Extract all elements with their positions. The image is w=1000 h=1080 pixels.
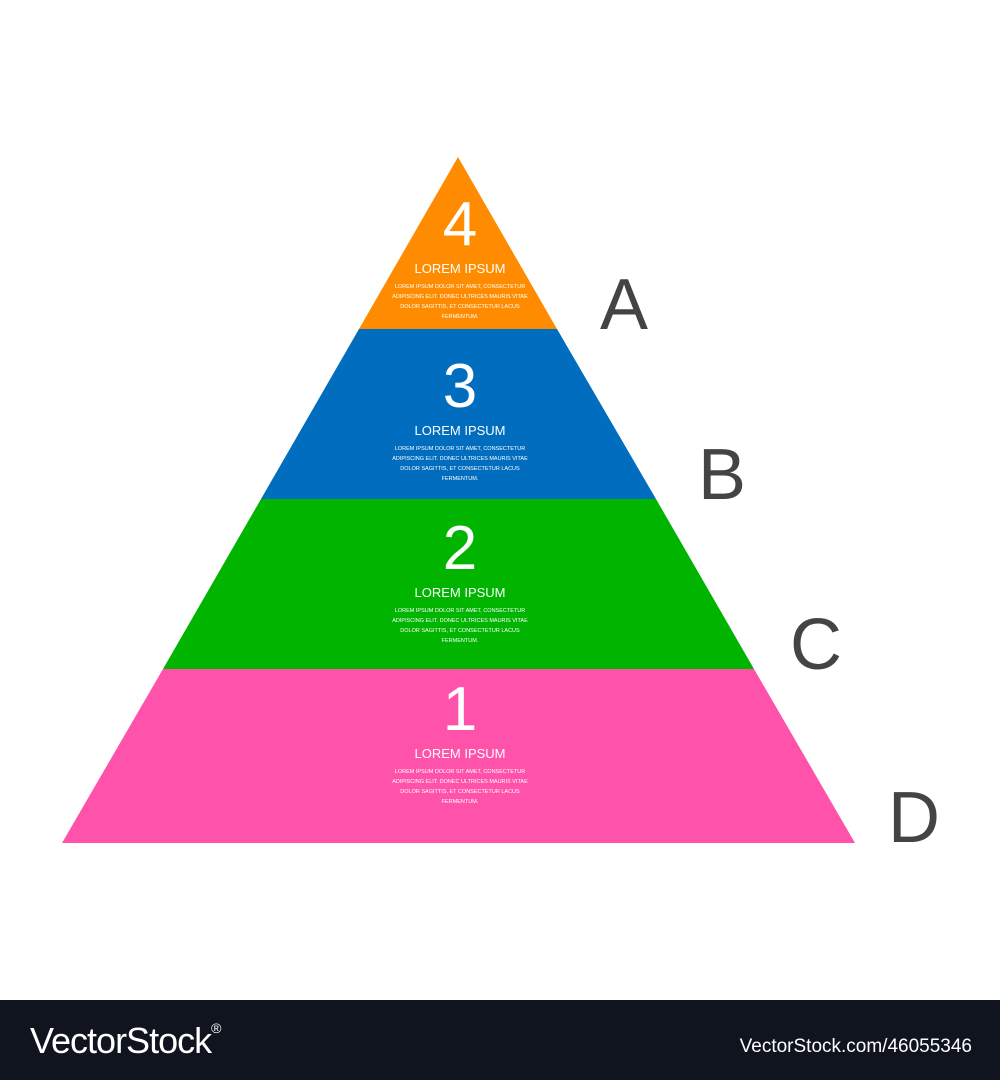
layer 4 orange: DOLOR SAGITTIS, ET CONSECTETUR LACUS: [400, 304, 520, 310]
layer 3 blue: 3: [443, 352, 477, 421]
layer 1 pink: LOREM IPSUM DOLOR SIT AMET, CONSECTETUR: [395, 769, 525, 775]
layer 1 pink: LOREM IPSUM: [414, 746, 506, 761]
side letters: B: [698, 435, 746, 515]
footer logo: VectorStock®: [30, 1020, 220, 1061]
layer 1 pink: FERMENTUM.: [442, 799, 479, 805]
layer 1 pink: ADIPISCING ELIT. DONEC ULTRICES MAURIS VITAE: [392, 779, 528, 785]
layer 1 pink: [62, 669, 855, 843]
layer 3 blue: LOREM IPSUM: [414, 423, 506, 438]
layer 4 orange: 4: [443, 190, 477, 259]
layer 1 pink: DOLOR SAGITTIS, ET CONSECTETUR LACUS: [400, 789, 520, 795]
layer 3 blue: DOLOR SAGITTIS, ET CONSECTETUR LACUS: [400, 466, 520, 472]
side letters: [600, 265, 940, 858]
layer 2 green: LOREM IPSUM: [414, 585, 506, 600]
layer 3 blue: FERMENTUM.: [442, 476, 479, 482]
side letters: A: [600, 265, 648, 345]
layer 2 green: FERMENTUM.: [442, 638, 479, 644]
footer: [0, 1000, 1000, 1080]
layer 3 blue: [261, 329, 656, 499]
footer url: VectorStock.com/46055346: [740, 1036, 972, 1057]
layer 2 green: [163, 499, 754, 669]
layer 4 orange: LOREM IPSUM: [414, 261, 506, 276]
layer 4 orange: ADIPISCING ELIT. DONEC ULTRICES MAURIS VITAE: [392, 294, 528, 300]
layer 3 blue: ADIPISCING ELIT. DONEC ULTRICES MAURIS VITAE: [392, 456, 528, 462]
layer 3 blue: LOREM IPSUM DOLOR SIT AMET, CONSECTETUR: [395, 446, 525, 452]
layer 4 orange: LOREM IPSUM DOLOR SIT AMET, CONSECTETUR: [395, 284, 525, 290]
layer 2 green: ADIPISCING ELIT. DONEC ULTRICES MAURIS VITAE: [392, 618, 528, 624]
side letters: D: [888, 778, 940, 858]
layer 1 pink: 1: [443, 675, 477, 744]
layer 4 orange: [359, 157, 557, 329]
side letters: C: [790, 605, 842, 685]
layer 2 green: 2: [443, 514, 477, 583]
layer 2 green: LOREM IPSUM DOLOR SIT AMET, CONSECTETUR: [395, 608, 525, 614]
layer 2 green: DOLOR SAGITTIS, ET CONSECTETUR LACUS: [400, 628, 520, 634]
layer 4 orange: FERMENTUM.: [442, 314, 479, 320]
